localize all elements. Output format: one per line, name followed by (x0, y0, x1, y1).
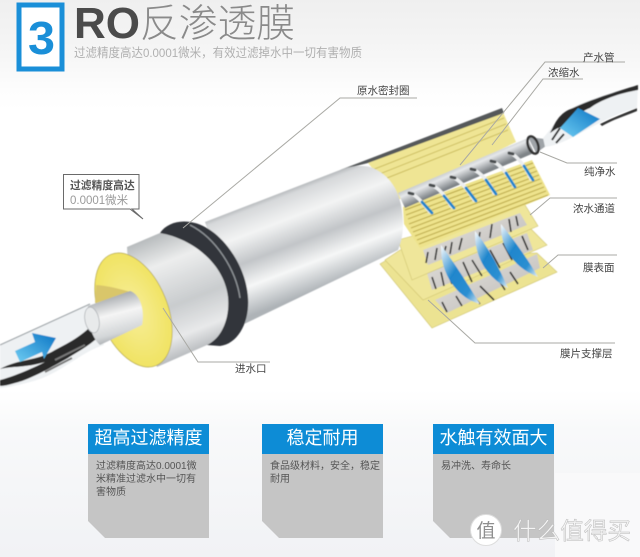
text: filtration precision: 过滤精度高达0.0001微 (96, 461, 197, 472)
panel: large contact area (433, 424, 554, 538)
text: filtration precision: 米精准过滤水中一切有 (96, 474, 196, 485)
inlet flow arrow (15, 333, 56, 362)
text: stable and durable (270, 460, 380, 483)
label: raw water seal: 原水密封圈 (357, 84, 410, 97)
title (74, 0, 295, 49)
heading: stable and durable: 稳定耐用 (286, 428, 358, 448)
support plate 3 (380, 253, 557, 328)
label: concentrate: 浓缩水 (548, 66, 580, 79)
front silver section (127, 233, 228, 367)
support plate 2 (385, 228, 547, 300)
central permeate pipe (398, 138, 534, 208)
callout: 0.0001微米 (70, 193, 129, 207)
text: filtration precision (96, 460, 196, 496)
inlet pipe (82, 291, 143, 345)
label: membrane support layer: 膜片支撑层 (560, 347, 612, 360)
heading: filtration precision (88, 424, 209, 454)
outlet water stream (543, 85, 638, 147)
flow swirl 3 (501, 224, 538, 277)
main silver housing (205, 166, 403, 326)
heading: large contact area (433, 424, 554, 454)
label: concentrate channel: 浓水通道 (573, 202, 615, 215)
outlet flow arrow (560, 108, 600, 137)
panel: stable and durable (262, 424, 383, 538)
small tubes with blue drops (409, 153, 533, 213)
icon: step number 3: 3 (28, 12, 55, 64)
membrane surface 3 (435, 254, 540, 313)
membrane surface 2 (427, 233, 533, 290)
flow swirl 1 (441, 245, 480, 304)
heading: large contact area: 水触有效面大 (440, 428, 548, 448)
flow swirl 2 (475, 231, 508, 288)
black seal ring (160, 221, 248, 346)
membrane element illustration (0, 85, 638, 388)
label: pure water: 纯净水 (584, 165, 616, 178)
membrane surface 1 (423, 213, 527, 265)
watermark: 什么值得买 (513, 518, 631, 544)
upper yellow wrap (340, 108, 516, 200)
title: RO (74, 0, 140, 48)
text: stable and durable: 食品级材料，安全，稳定 (270, 461, 380, 472)
text: large contact area: 易冲洗、寿命长 (441, 461, 511, 472)
leader lines (163, 62, 625, 362)
outlet collar (528, 137, 546, 153)
text: stable and durable: 耐用 (270, 474, 290, 485)
yellow end cap (79, 242, 188, 378)
icon: step number 3 (19, 5, 62, 69)
membrane texture streaks (426, 216, 532, 312)
label: membrane surface: 膜表面 (583, 261, 614, 274)
watermark: 值 (476, 520, 496, 542)
callout (64, 174, 143, 219)
support plate 1 (398, 205, 538, 280)
text: filtration precision: 害物质 (96, 487, 126, 498)
label: water inlet: 进水口 (235, 363, 266, 375)
striped channel wrap (403, 160, 550, 248)
heading: filtration precision: 超高过滤精度 (94, 428, 202, 448)
label: product water pipe: 产水管 (583, 51, 614, 64)
heading: stable and durable (262, 424, 383, 454)
background patch (555, 473, 640, 557)
callout: 过滤精度高达 (70, 178, 135, 192)
panel: filtration precision (88, 424, 209, 538)
subtitle: 过滤精度高达0.0001微米，有效过滤掉水中一切有害物质 (74, 45, 362, 60)
inlet water tube (0, 304, 105, 388)
